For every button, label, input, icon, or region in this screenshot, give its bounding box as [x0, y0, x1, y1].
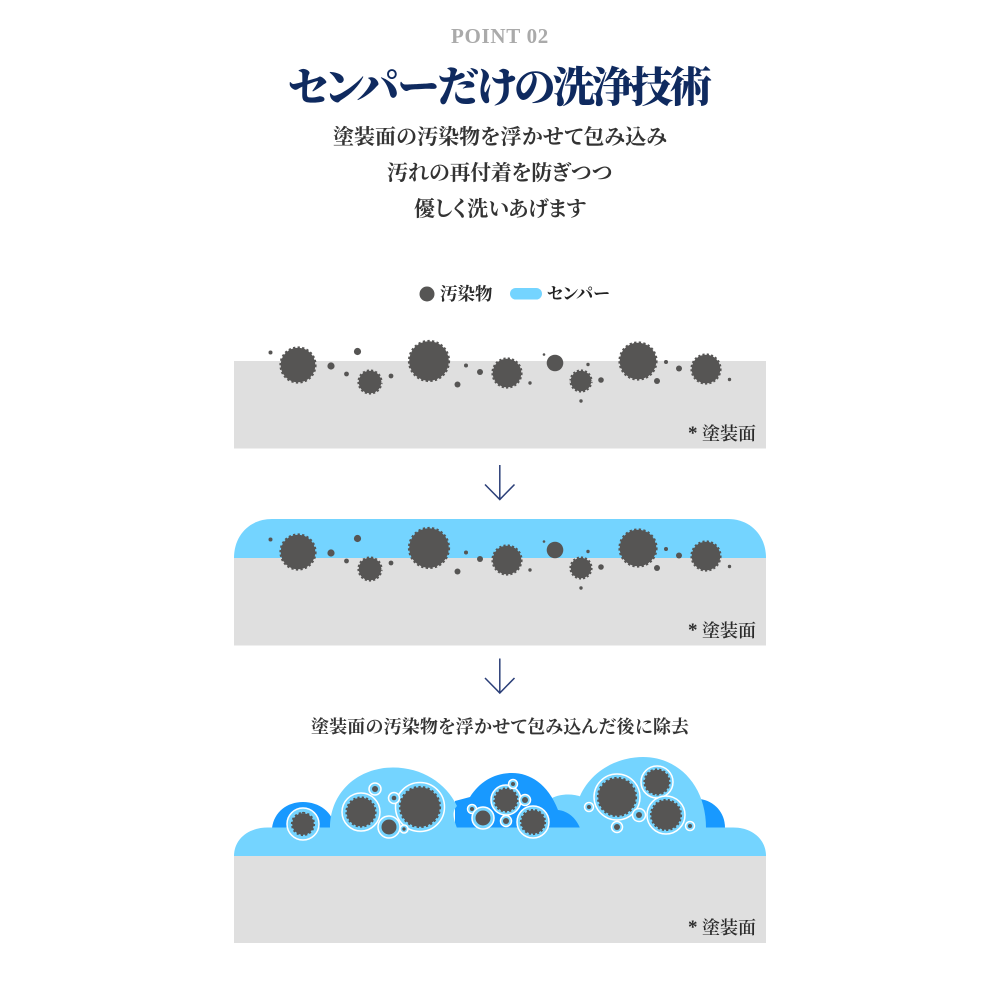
panel: step 2 senper covering the surface [234, 519, 766, 646]
surface 1 [234, 361, 766, 448]
legend: contaminant dot [420, 286, 434, 302]
senper layer [234, 519, 766, 558]
arrow 1 [485, 465, 514, 500]
light foam domes [330, 757, 706, 828]
legend: contaminant label: 汚染物 [440, 284, 493, 304]
legend [420, 284, 610, 304]
surface label 3: * [688, 917, 698, 938]
panel: step 3 contaminants lifted in foam [234, 757, 766, 943]
subtitle text block: 塗装面の汚染物を浮かせて包み込み [333, 125, 667, 149]
panel: step 1 painted surface with contaminants [234, 341, 766, 448]
step 3 caption: 塗装面の汚染物を浮かせて包み込んだ後に除去 [311, 716, 690, 737]
light foam bump behind [552, 794, 582, 828]
bubbles with contaminants [287, 766, 694, 840]
contaminants 1 [268, 341, 731, 403]
surface label 2: 塗装面 [698, 620, 756, 641]
surface label 2: * [688, 620, 698, 641]
dark foam domes [272, 773, 725, 828]
surface label 3: 塗装面 [698, 917, 756, 938]
subtitle text block: 汚れの再付着を防ぎつつ [387, 161, 613, 185]
surface label 1: * [688, 423, 698, 444]
legend: senper pill [510, 288, 542, 300]
contaminants 2 [268, 528, 731, 590]
subtitle text block: 優しく洗いあげます [414, 197, 586, 221]
eyebrow: POINT 02: POINT 02 [451, 24, 549, 48]
surface 2 [234, 558, 766, 646]
title: センパーだけの洗浄技術 [288, 65, 712, 112]
surface 3 [234, 855, 766, 943]
arrow 2 [485, 658, 514, 693]
subtitle text block [333, 125, 667, 221]
surface label 1: 塗装面 [698, 423, 756, 444]
senper base layer [234, 828, 766, 856]
legend: senper label: センパー [547, 284, 610, 304]
